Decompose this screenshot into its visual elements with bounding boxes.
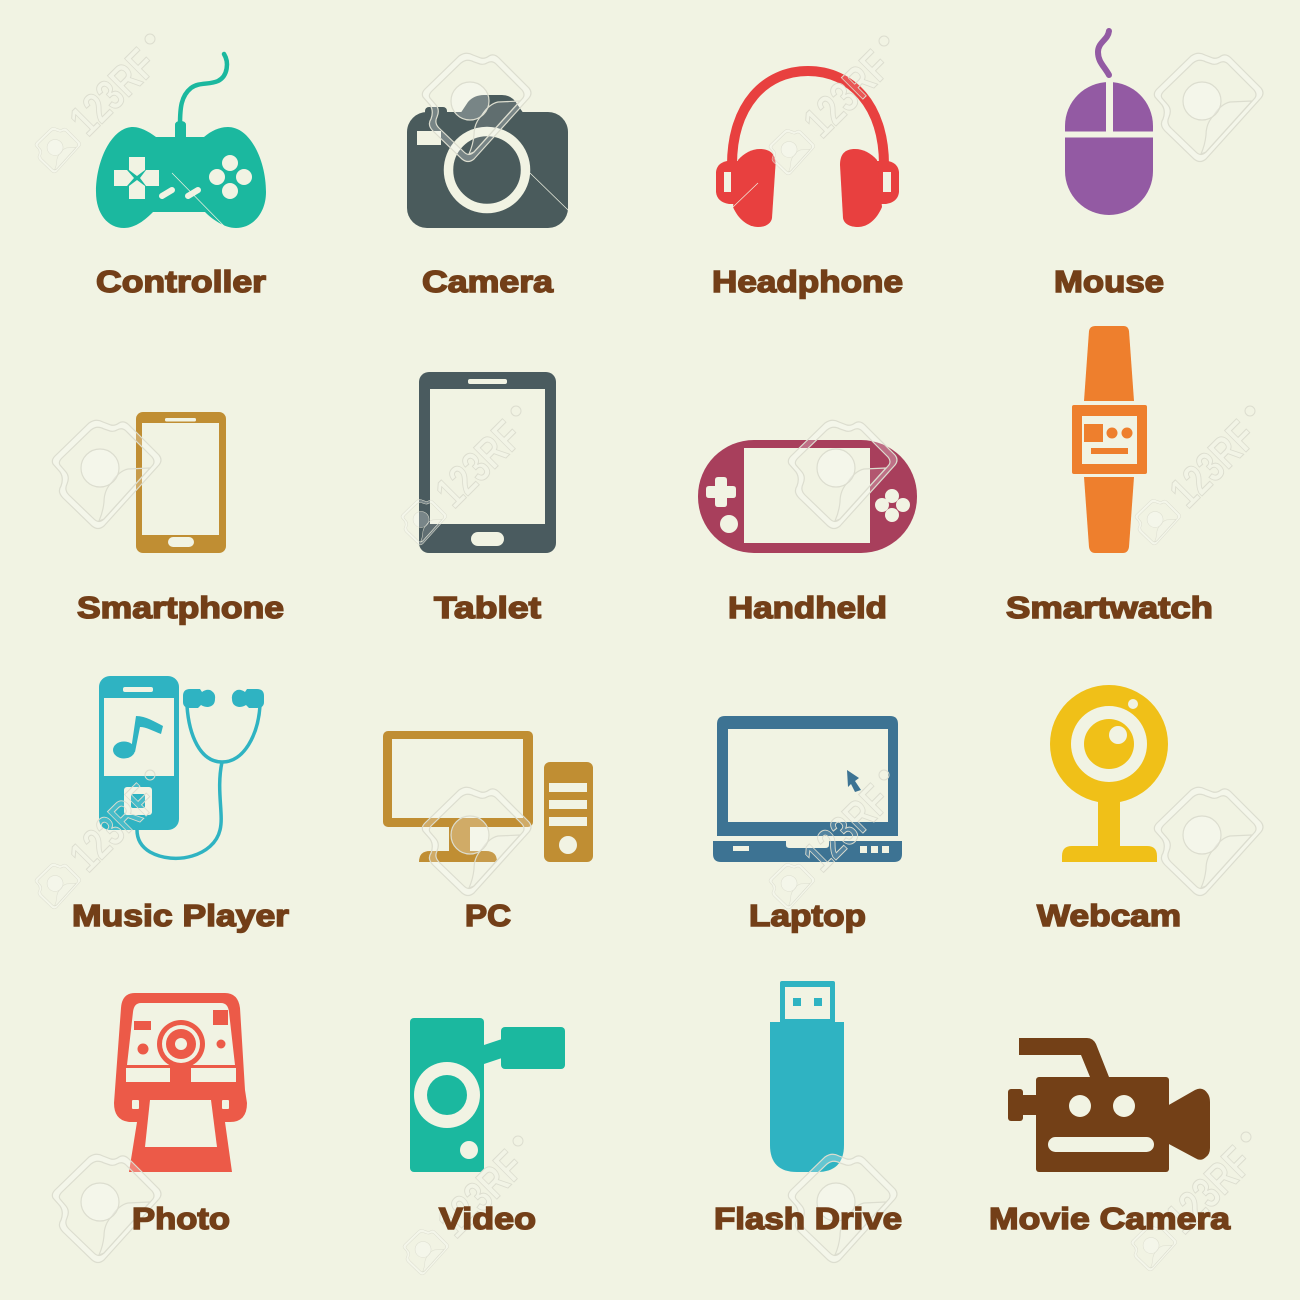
label: camera: Camera <box>422 264 554 299</box>
icon: video <box>410 1018 565 1172</box>
panel: headphone <box>712 36 903 299</box>
panel: photo <box>52 993 247 1262</box>
panel: camera <box>407 53 568 299</box>
label: handheld: Handheld <box>728 590 887 625</box>
panel: laptop <box>713 716 902 933</box>
icon: pc <box>383 731 593 862</box>
icon: handheld <box>698 440 917 553</box>
label: video: Video <box>439 1201 536 1236</box>
label: tablet: Tablet <box>434 590 541 625</box>
icon: headphone <box>716 71 899 227</box>
icon: tablet <box>419 372 556 553</box>
panel: smartphone <box>52 412 284 625</box>
panel: controller <box>35 34 266 299</box>
icon: music player <box>99 676 264 858</box>
label: controller: Controller <box>96 264 266 299</box>
icon: smartphone <box>136 412 226 553</box>
panel: music player <box>35 676 289 933</box>
icon: photo <box>114 993 247 1172</box>
label: headphone: Headphone <box>712 264 903 299</box>
label: movie camera: Movie Camera <box>989 1201 1231 1236</box>
panel: tablet <box>401 372 556 625</box>
panel: smartwatch <box>1006 326 1266 625</box>
label: smartphone: Smartphone <box>77 590 284 625</box>
label: mouse: Mouse <box>1054 264 1164 299</box>
panel: controller: 123RF <box>60 40 166 145</box>
panel: video: 123RF <box>428 1142 534 1247</box>
panel: handheld <box>698 420 917 625</box>
icon: movie camera <box>1008 1038 1210 1172</box>
icon: smartwatch <box>1072 326 1147 553</box>
panel: laptop: 123RF <box>794 776 900 881</box>
panel: pc <box>383 731 593 933</box>
panel: webcam <box>1037 685 1263 933</box>
panel: flash drive <box>714 981 902 1262</box>
icon: camera <box>407 95 568 228</box>
label: laptop: Laptop <box>749 898 866 933</box>
panel: mouse <box>1054 31 1263 299</box>
icon: laptop <box>713 716 902 862</box>
label: photo: Photo <box>132 1201 230 1236</box>
label: webcam: Webcam <box>1037 898 1181 933</box>
panel: video <box>403 1018 565 1275</box>
panel: tablet: 123RF <box>426 412 532 517</box>
icon: mouse <box>1065 31 1153 215</box>
panel: movie camera <box>989 1038 1262 1271</box>
icon: flash drive <box>770 981 844 1172</box>
label: music player: Music Player <box>72 898 289 933</box>
icon: webcam <box>1050 685 1168 862</box>
label: pc: PC <box>465 898 511 933</box>
label: smartwatch: Smartwatch <box>1006 590 1213 625</box>
icon: controller <box>96 54 266 228</box>
label: flash drive: Flash Drive <box>714 1201 902 1236</box>
panel: headphone: 123RF <box>794 42 900 147</box>
panel: music player: 123RF <box>60 776 166 881</box>
panel: movie camera: 123RF <box>1156 1138 1262 1243</box>
panel: smartwatch: 123RF <box>1160 412 1266 517</box>
